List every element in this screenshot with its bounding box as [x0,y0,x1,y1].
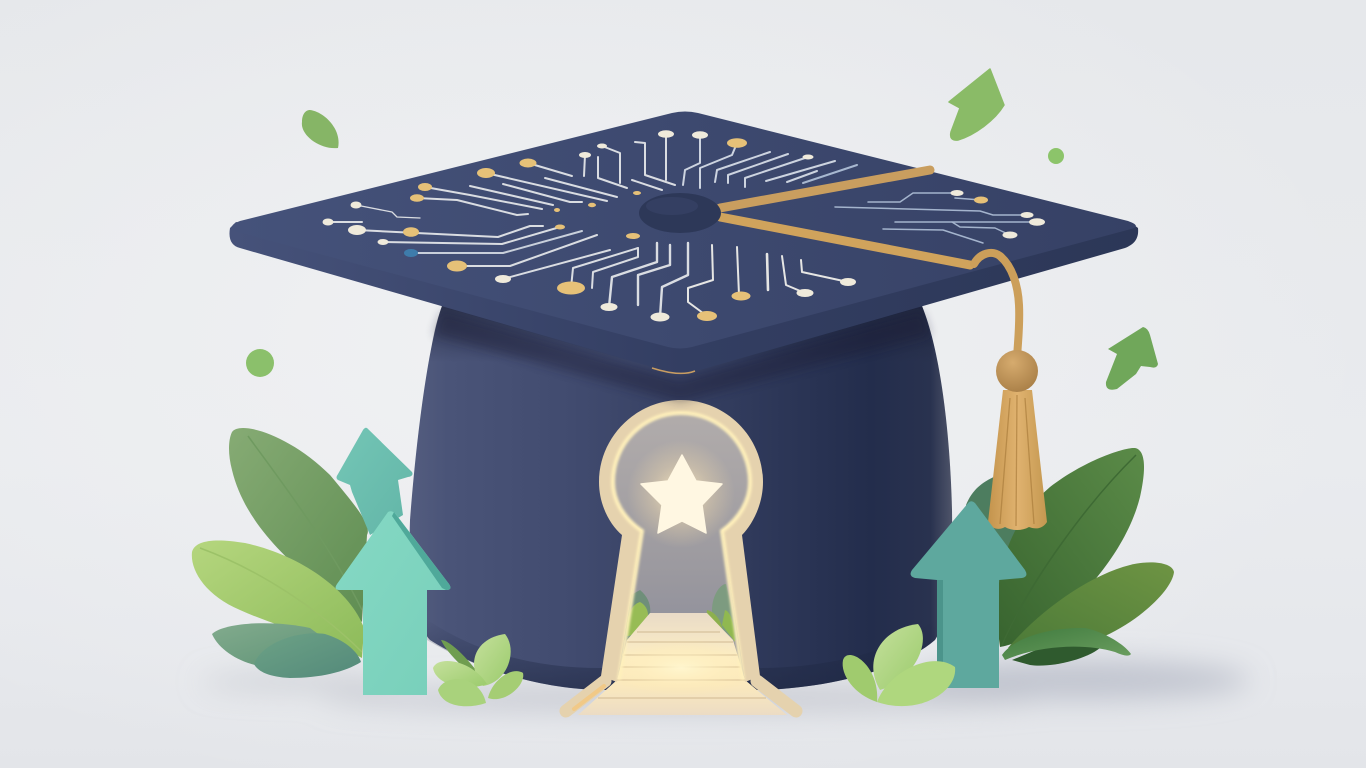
keyhole opening [613,413,750,680]
cap body [410,306,952,690]
small plant left [433,634,523,706]
circuit traces left [328,134,688,317]
floating arrow right [1106,327,1158,390]
front teal arrow left [336,511,450,695]
ground shadow [200,660,1250,712]
board top [232,112,1136,348]
illustration: graduation cap with keyhole doorway [192,68,1256,726]
front teal arrow right [911,501,1026,688]
icon: star [641,455,722,533]
keyhole doorway [613,413,750,680]
gold cord lower [720,217,970,265]
inner plants [626,584,736,642]
back teal arrow left [336,428,412,535]
star glow [627,440,735,548]
steps path [578,613,787,715]
circuit traces right of centre [683,135,857,316]
left plant: large leaves [192,428,368,678]
centre button [639,193,721,233]
floating leaf top left [302,110,339,148]
keyhole frame feet [566,681,796,711]
floating ball right [1048,148,1064,164]
board side [229,222,1138,372]
tassel [974,253,1047,530]
circuit nodes [322,130,1045,322]
floating arrow top right [949,69,1004,140]
right plant: large leaves [966,448,1174,666]
circuit traces far right [835,193,1037,243]
gold cord upper [720,170,930,208]
small plant right [843,624,955,706]
cap board underside shadow [434,312,930,402]
mortarboard [229,112,1138,373]
keyhole frame [599,400,763,682]
floating ball left [246,349,274,377]
